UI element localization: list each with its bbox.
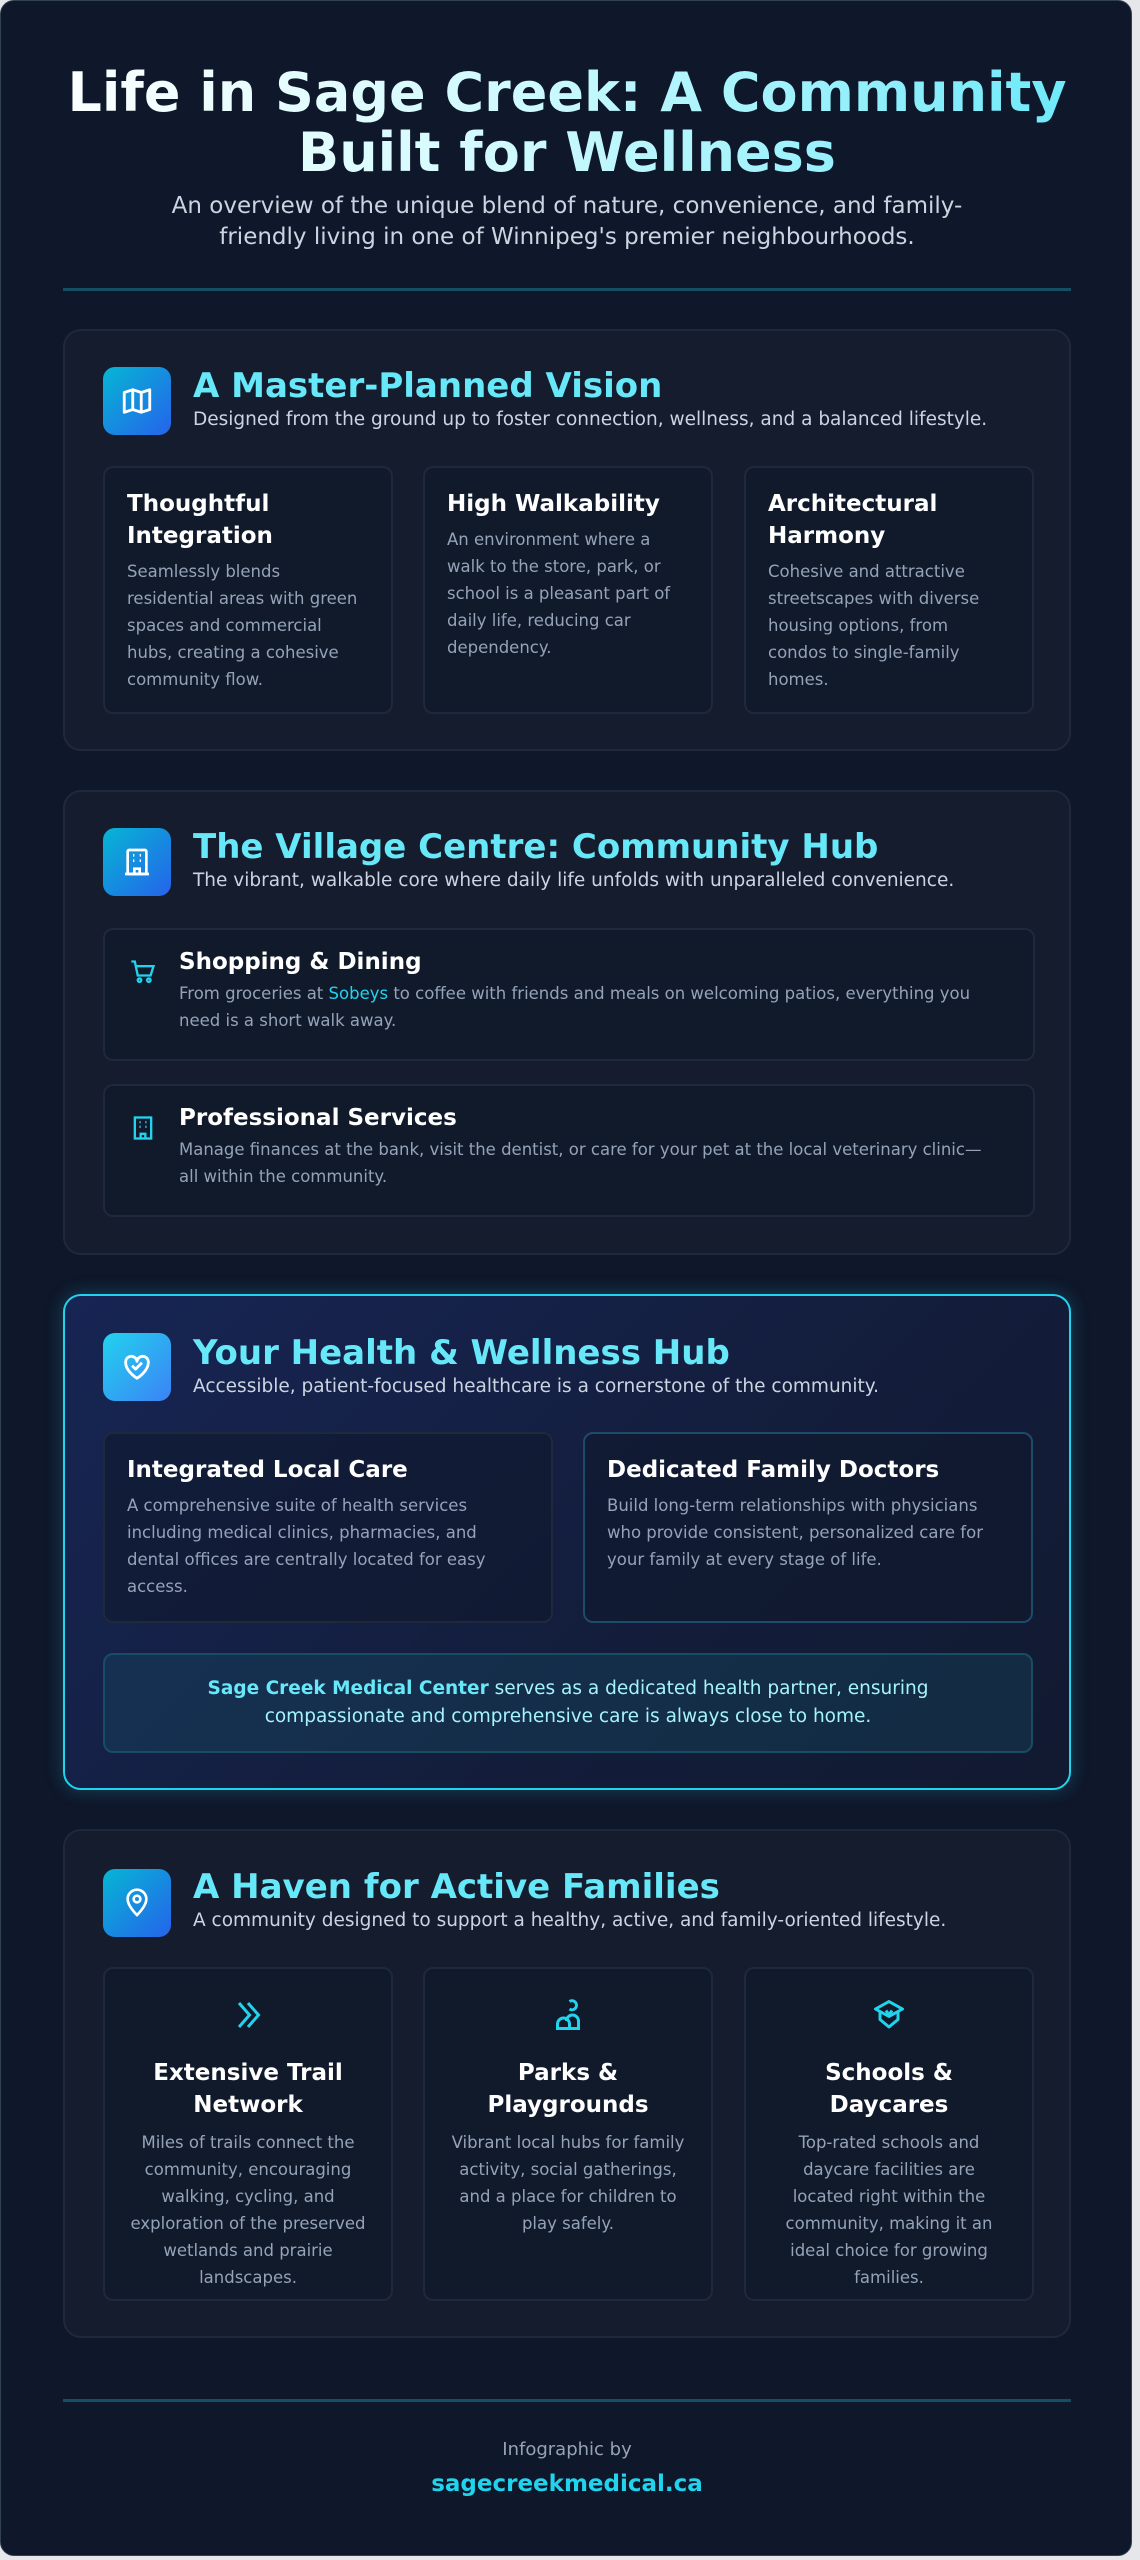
panel: health & wellness hub [63, 1294, 1071, 1790]
subheading: A community designed to support a healthy, active, and family-oriented lifestyle. [193, 1910, 946, 1931]
heading: A Haven for Active Families [193, 1867, 720, 1907]
subheading: Designed from the ground up to foster connection, wellness, and a balanced lifestyle. [193, 409, 987, 430]
heading: Your Health & Wellness Hub [193, 1333, 730, 1373]
card: integrated local care: A comprehensive suite of health services including medical clinics, pharmacies, and dental offices are centrally located for easy access. [127, 1496, 486, 1596]
icon: heart [103, 1333, 171, 1401]
icon: location pin [103, 1869, 171, 1937]
card: high walkability: High Walkability [447, 491, 660, 517]
card: schools: Schools & Daycares [825, 2060, 953, 2118]
panel: active families [63, 1829, 1071, 2338]
card: thoughtful integration: Seamlessly blends residential areas with green spaces and commercial hubs, creating a cohesive community flow. [127, 562, 357, 689]
row card: professional services: Professional Services [179, 1105, 457, 1131]
card: thoughtful integration: Thoughtful Integration [127, 491, 273, 549]
icon: building [103, 828, 171, 896]
subtitle: An overview of the unique blend of nature, convenience, and family-friendly living in one of Winnipeg's premier neighbourhoods. [172, 193, 962, 250]
card: architectural harmony: Architectural Harmony [768, 491, 937, 549]
icon: office [134, 1116, 152, 1140]
icon: map [103, 367, 171, 435]
panel: village centre [63, 790, 1071, 1255]
heading: A Master-Planned Vision [193, 366, 662, 406]
card: schools [744, 1967, 1034, 2301]
card: dedicated family doctors [583, 1432, 1033, 1623]
subheading: Accessible, patient-focused healthcare is a cornerstone of the community. [193, 1376, 879, 1397]
footer: Infographic by [502, 2439, 632, 2460]
card: integrated local care: Integrated Local Care [127, 1457, 408, 1483]
card: thoughtful integration [103, 466, 393, 714]
card: trail network: Extensive Trail Network [153, 2060, 343, 2118]
icon: graduation cap [874, 2000, 904, 2028]
callout: medical center [103, 1653, 1033, 1753]
card: high walkability [423, 466, 713, 714]
card: trail network: Miles of trails connect the community, encouraging walking, cycling, and exploration of the preserved wetlands and prairie landscapes. [131, 2133, 365, 2287]
card: parks: Vibrant local hubs for family activity, social gatherings, and a place for children to play safely. [452, 2133, 684, 2233]
card: trail network [103, 1967, 393, 2301]
row card: shopping & dining: Shopping & Dining [179, 949, 422, 975]
card: schools: Top-rated schools and daycare facilities are located right within the community, making it an ideal choice for growing families. [786, 2133, 992, 2287]
panel: master-planned vision [63, 329, 1071, 751]
card: dedicated family doctors: Dedicated Family Doctors [607, 1457, 939, 1483]
row card: professional services: Manage finances at the bank, visit the dentist, or care for your pet at the local veterinary clinic— [179, 1140, 981, 1159]
subheading: The vibrant, walkable core where daily life unfolds with unparalleled convenience. [193, 870, 954, 891]
icon: cart [131, 960, 156, 984]
row card: professional services: all within the community. [179, 1167, 387, 1186]
card: architectural harmony [744, 466, 1034, 714]
card: architectural harmony: Cohesive and attractive streetscapes with diverse housing options, from condos to single-family homes. [768, 562, 979, 689]
card: integrated local care [103, 1432, 553, 1623]
title [21, 63, 1113, 183]
title: Built for Wellness [298, 121, 836, 184]
row card: professional services [103, 1084, 1035, 1217]
card: parks: Parks & Playgrounds [487, 2060, 649, 2118]
heading: The Village Centre: Community Hub [193, 827, 878, 867]
card: dedicated family doctors: Build long-term relationships with physicians who provide consistent, personalized care for your family at every stage of life. [607, 1496, 983, 1569]
footer [431, 2439, 703, 2497]
icon: person [556, 1999, 580, 2030]
icon: chevrons [238, 2002, 260, 2028]
callout: medical center: Sage Creek Medical Center serves as a dedicated health partner, ensuring compassionate and comprehensive care is always close to home. [208, 1678, 928, 1727]
title: Life in Sage Creek: A Community [67, 61, 1067, 124]
card: high walkability: An environment where a walk to the store, park, or school is a pleasant part of daily life, reducing car dependency. [447, 530, 670, 657]
card: parks [423, 1967, 713, 2301]
footer: sagecreekmedical.ca [431, 2471, 703, 2497]
row card: shopping & dining [103, 928, 1035, 1061]
row card: shopping & dining: From groceries at Sobeys to coffee with friends and meals on welcoming patios, everything you need is a short walk away. [179, 984, 970, 1030]
